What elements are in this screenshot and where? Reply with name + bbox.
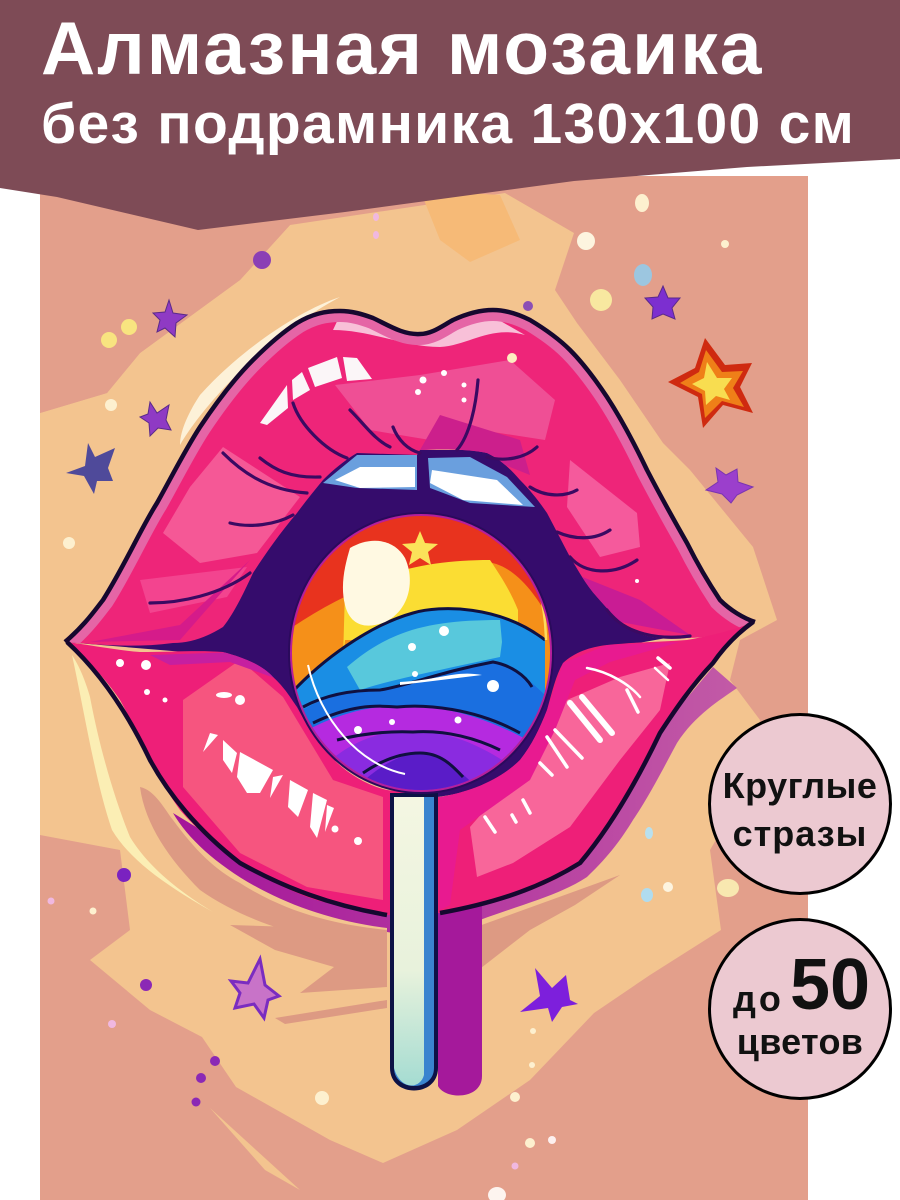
badge: up to 50 colours <box>708 918 892 1100</box>
title line 2: без подрамника 130х100 см <box>41 92 855 156</box>
illustration: lips with rainbow lollipop <box>40 176 808 1200</box>
lip drop shadow <box>173 667 737 940</box>
badge text line 2: стразы <box>733 813 867 854</box>
title <box>41 6 855 156</box>
badge number: 50 <box>790 945 870 1025</box>
decorative dots <box>48 194 739 1200</box>
badge: round rhinestones <box>708 713 892 895</box>
badge text line 1: Круглые <box>723 765 877 806</box>
title line 1: Алмазная мозаика <box>41 6 764 90</box>
upper lip <box>60 297 760 650</box>
decorative stars <box>66 286 753 1022</box>
lollipop candy <box>288 512 554 794</box>
lower lip <box>60 620 760 920</box>
painting background <box>40 176 808 1200</box>
header banner <box>0 0 900 230</box>
lollipop stick <box>390 793 438 1090</box>
badge word до: до <box>733 978 784 1019</box>
stick shadow <box>438 905 482 1095</box>
teeth <box>323 455 535 507</box>
star on candy <box>402 531 438 565</box>
badge caption: цветов <box>737 1021 863 1062</box>
mouth interior <box>65 450 755 800</box>
